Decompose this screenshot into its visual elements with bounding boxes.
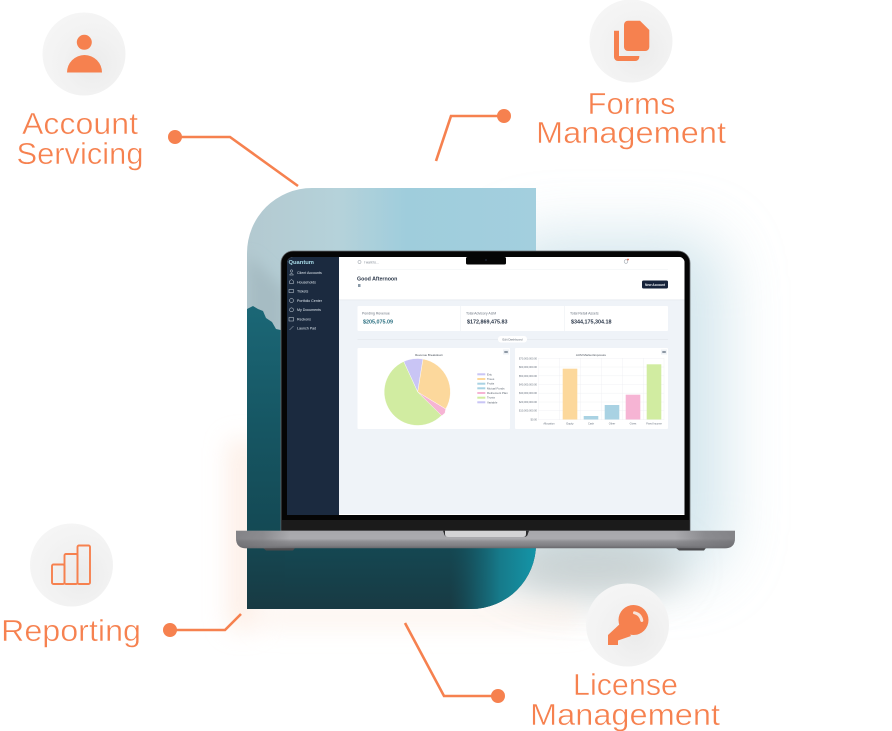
y axis labels <box>519 356 538 422</box>
laptop lid <box>281 251 690 531</box>
panel: ocean photo <box>247 188 545 612</box>
edit dashboard divider <box>358 336 668 342</box>
x axis labels: Other <box>609 422 615 426</box>
bars <box>563 364 661 420</box>
new account button <box>642 280 668 288</box>
connector: license management <box>405 623 505 703</box>
sidebar: Reckons <box>297 317 311 321</box>
y axis labels: $70,000,000.00 <box>519 356 538 360</box>
heading: account servicing: Servicing <box>16 137 144 171</box>
x axis labels <box>543 422 662 426</box>
heading: reporting: Reporting <box>1 614 141 648</box>
x axis labels: Fixed Income <box>646 422 662 426</box>
y axis labels: $60,000,000.00 <box>519 365 538 369</box>
icon: reporting <box>30 524 113 606</box>
connector: reporting <box>163 614 241 637</box>
sidebar: Portfolio Center <box>297 299 323 303</box>
laptop <box>236 251 735 550</box>
bar chart card: AUM Market Exposure <box>576 353 606 357</box>
pie legend: Trusts <box>487 396 495 400</box>
pie legend: Fruits <box>487 382 495 386</box>
chart grid <box>538 358 664 420</box>
y axis labels: $10,000,000.00 <box>519 409 538 413</box>
pie chart <box>384 359 450 425</box>
heading: account servicing <box>16 107 144 171</box>
sidebar <box>287 257 339 515</box>
stat cards: $172,869,475.83 <box>467 320 507 326</box>
background glow <box>228 235 725 630</box>
icon: license management <box>586 584 669 666</box>
pie legend: Trees <box>487 377 495 381</box>
sidebar: Launch Pad <box>297 326 316 330</box>
heading: license management: Management <box>530 698 721 731</box>
laptop base <box>236 531 735 550</box>
y axis labels: $40,000,000.00 <box>519 382 538 386</box>
heading: license management <box>530 668 721 731</box>
x axis labels: Cash <box>588 422 595 426</box>
y axis labels: $30,000,000.00 <box>519 391 538 395</box>
x axis labels: Allocation <box>543 422 555 426</box>
stat cards: Total Advisory AUM <box>466 312 496 316</box>
stat cards: $205,075.09 <box>363 320 393 326</box>
icon: account servicing <box>42 12 126 96</box>
x axis labels: Gives <box>630 422 637 426</box>
sidebar: Quantum <box>288 260 314 266</box>
y axis labels: $20,000,000.00 <box>519 400 538 404</box>
pie card <box>358 348 510 429</box>
heading: forms management: Management <box>536 116 727 150</box>
stat cards: Total Retail Assets <box>570 312 599 316</box>
stat cards: $344,175,304.18 <box>571 320 611 326</box>
connector: forms management <box>436 109 511 161</box>
heading: forms management <box>536 87 727 150</box>
pie card: Revenue Breakdown <box>415 353 443 357</box>
dashboard screen <box>287 257 684 515</box>
top bar <box>358 257 629 264</box>
greeting: Good Afternoon <box>357 276 397 282</box>
heading: account servicing: Account <box>22 107 139 141</box>
pie legend: Eric <box>487 372 493 376</box>
top bar: I want to... <box>364 260 379 264</box>
connector: account servicing <box>168 130 298 186</box>
new account button: New Account <box>645 283 666 287</box>
greeting <box>357 276 397 287</box>
heading: license management: License <box>573 668 678 702</box>
pie legend: Mutual Funds <box>487 386 505 390</box>
icon: forms management <box>590 0 672 82</box>
bar chart card <box>515 348 668 429</box>
x axis labels: Equity <box>566 422 574 426</box>
stat cards <box>358 306 668 331</box>
stat cards: Pending Revenue <box>362 312 390 316</box>
pie legend: Variable <box>487 400 498 404</box>
heading: forms management: Forms <box>588 87 676 121</box>
sidebar: My Documents <box>297 308 321 312</box>
pie legend: Retirement Plan <box>487 391 508 395</box>
pie legend <box>477 372 508 404</box>
y axis labels: $0.00 <box>530 418 538 422</box>
sidebar: Households <box>297 280 316 284</box>
sidebar: Tickets <box>297 290 308 294</box>
edit dashboard divider: Edit Dashboard <box>503 337 523 341</box>
sidebar: Client Accounts <box>297 271 322 275</box>
y axis labels: $50,000,000.00 <box>519 374 538 378</box>
